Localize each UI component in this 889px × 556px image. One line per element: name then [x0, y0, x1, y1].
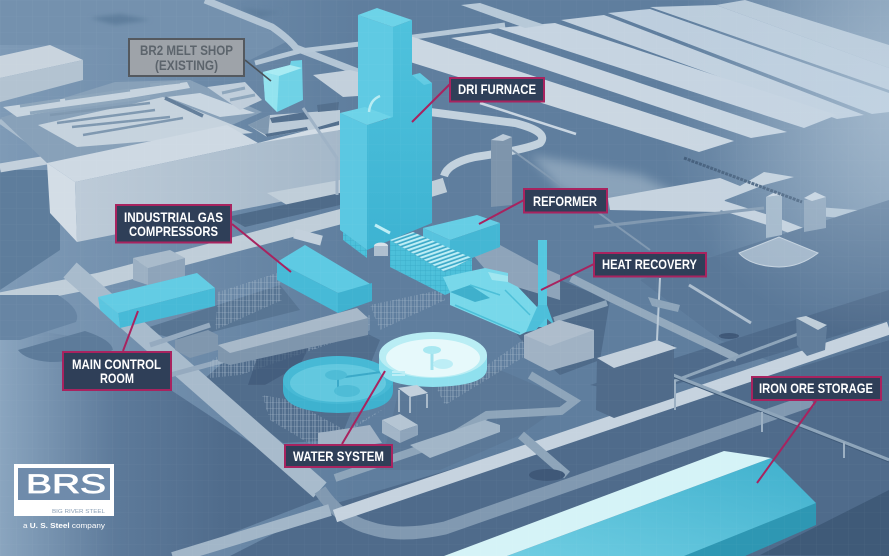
grey process buildings: [133, 250, 418, 452]
existing mill: yard and stripes: [0, 80, 262, 163]
label: main control room: MAIN CONTROL: [72, 356, 161, 372]
BR2 melt shop building: [263, 60, 303, 112]
label: main control room: [63, 352, 171, 390]
grey building and hall by the stack: [524, 297, 827, 418]
leader: reformer: [479, 200, 524, 224]
iron ore storage building: [444, 451, 816, 556]
label: water system: [285, 445, 392, 467]
existing mill: background block: [0, 45, 83, 102]
leader: water system: [342, 371, 385, 444]
logo: Big River Steel: BRS: [26, 469, 106, 499]
label: industrial gas compressors: [116, 205, 231, 242]
label: DRI furnace: [450, 78, 544, 102]
logo: Big River Steel: BIG RIVER STEEL: [52, 509, 105, 515]
label: reformer: REFORMER: [533, 193, 597, 209]
label: industrial gas compressors: COMPRESSORS: [129, 223, 218, 239]
label: industrial gas compressors: INDUSTRIAL GAS: [124, 209, 223, 225]
DRI furnace tower: [340, 8, 432, 258]
label: heat recovery: [594, 253, 706, 276]
conveyors: [512, 150, 889, 462]
label: BR2 melt shop: [129, 39, 244, 76]
heat recovery unit and stack: [443, 240, 554, 335]
leader: main control room: [123, 311, 138, 351]
concrete pad at heat recovery: [473, 245, 560, 300]
leader: BR2 melt shop: [245, 60, 271, 81]
label: heat recovery: HEAT RECOVERY: [602, 256, 698, 272]
leader: DRI furnace: [412, 84, 450, 122]
water system: light clarifier: [379, 332, 487, 413]
label: iron ore storage: [752, 377, 881, 400]
upper roads: [0, 0, 889, 300]
melt shop base: [248, 102, 340, 195]
label: reformer: [524, 189, 607, 212]
logo: Big River Steel: a U. S. Steel company: [23, 521, 105, 530]
water system: teal clarifier: [283, 356, 393, 413]
reformer modules: [374, 225, 472, 295]
leader: heat recovery: [541, 264, 594, 290]
ore stockpile rows: [410, 0, 889, 152]
lower lots and roads: [0, 172, 889, 556]
reformer: [423, 215, 500, 258]
label: BR2 melt shop: (EXISTING): [155, 57, 218, 73]
logo: Big River Steel: [14, 464, 114, 530]
industrial gas compressors building: [277, 245, 372, 313]
label: main control room: ROOM: [100, 370, 134, 386]
pipe racks and lattices: [210, 229, 535, 450]
label: DRI furnace: DRI FURNACE: [458, 81, 536, 97]
silos and cone pile: [491, 134, 826, 267]
existing mill: large building: [47, 122, 340, 242]
leader: iron ore storage: [757, 401, 816, 483]
label: water system: WATER SYSTEM: [293, 448, 384, 464]
label: BR2 melt shop: BR2 MELT SHOP: [140, 42, 233, 58]
main control room building: [98, 273, 215, 328]
leader: industrial gas compressors: [232, 224, 291, 272]
